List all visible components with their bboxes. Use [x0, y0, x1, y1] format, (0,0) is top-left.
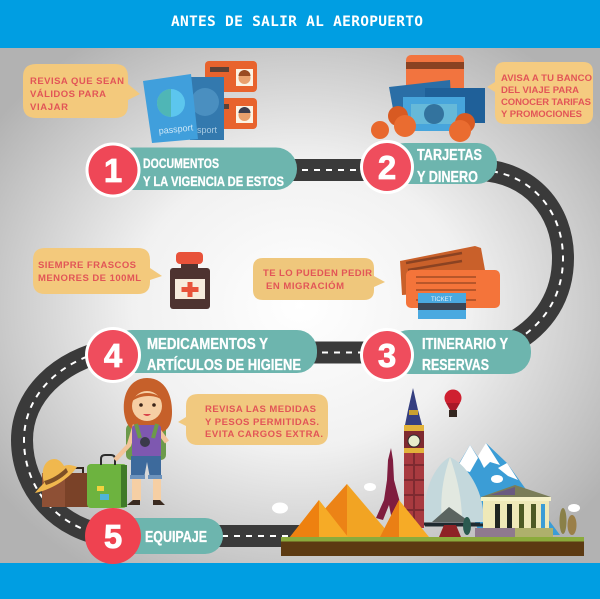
callout: itinerario: EN MIGRACIÓM: [266, 280, 344, 292]
step 1 pill: Y LA VIGENCIA DE ESTOS: [143, 174, 284, 189]
step 3 badge: [360, 328, 414, 382]
eiffel tower: [376, 448, 402, 520]
callout: tarjetas: AVISA A TU BANCO: [501, 73, 592, 84]
road: [22, 170, 563, 536]
icon: hot air balloon: [444, 390, 462, 417]
footer band: [0, 563, 600, 599]
step 1 badge: [86, 142, 140, 198]
lotus temple: [425, 457, 485, 525]
callout: documentos: VIAJAR: [30, 102, 68, 113]
step 3 pill: RESERVAS: [422, 357, 489, 374]
ground: [281, 541, 584, 556]
step 2 badge: [360, 140, 414, 194]
callout: itinerario: [253, 258, 385, 300]
parthenon: [475, 485, 553, 537]
callout: tarjetas: Y PROMOCIONES: [501, 109, 582, 120]
title: ANTES DE SALIR AL AEROPUERTO: [171, 14, 423, 30]
step 4 pill: [112, 330, 317, 374]
icon: tickets: TICKET: [431, 297, 453, 303]
icon: passports: [143, 74, 224, 143]
landmarks illustration: [272, 388, 584, 556]
callout: tarjetas: CONOCER TARIFAS: [501, 97, 591, 108]
mountains: [455, 443, 560, 535]
step 2 pill: Y DINERO: [417, 169, 478, 186]
step 3 pill: ITINERARIO Y: [422, 336, 509, 353]
big ben: [404, 388, 424, 528]
step 5 badge: 5: [104, 518, 122, 555]
callout: equipaje: [178, 394, 328, 445]
step 3 pill: [388, 330, 531, 374]
road rail: [424, 522, 480, 526]
icon: credit card and money: [371, 55, 485, 142]
callout: medicamentos: MENORES DE 100ML: [38, 273, 141, 284]
step 3 badge: 3: [378, 337, 396, 374]
callout: itinerario: TE LO PUEDEN PEDIR: [263, 268, 372, 279]
trees: [560, 508, 576, 535]
icon: traveller girl: [115, 378, 172, 505]
step 5 badge: [85, 508, 141, 564]
callout: tarjetas: [487, 62, 593, 124]
icon: id cards: [205, 61, 257, 129]
step 4 pill: MEDICAMENTOS Y: [147, 336, 269, 353]
icon: medicine bottle: [170, 252, 210, 309]
callout: documentos: VÁLIDOS PARA: [30, 89, 106, 100]
callout: medicamentos: [33, 248, 162, 294]
header band: [0, 0, 600, 48]
callout: documentos: [23, 64, 140, 118]
step 1 pill: DOCUMENTOS: [143, 156, 219, 171]
callout: documentos: REVISA QUE SEAN: [30, 76, 124, 87]
step 4 pill: ARTÍCULOS DE HIGIENE: [147, 357, 301, 374]
cloud: [272, 502, 288, 514]
step 2 badge: 2: [378, 149, 396, 186]
dome base: [439, 525, 461, 537]
step 2 pill: [385, 143, 497, 186]
icon: passports: sport: [197, 125, 218, 135]
pyramids: [290, 484, 429, 537]
small tree: [463, 517, 471, 535]
callout: equipaje: EVITA CARGOS EXTRA.: [205, 429, 323, 440]
callout: tarjetas: DEL VIAJE PARA: [501, 85, 579, 96]
step 4 badge: 4: [104, 337, 123, 374]
step 2 pill: TARJETAS: [417, 147, 482, 164]
step 4 badge: [85, 327, 141, 383]
step 5 pill: [113, 518, 223, 554]
clouds: [364, 475, 580, 512]
callout: equipaje: REVISA LAS MEDIDAS: [205, 404, 316, 415]
step 5 pill: EQUIPAJE: [145, 529, 207, 546]
icon: passports: passport: [158, 122, 194, 136]
callout: medicamentos: SIEMPRE FRASCOS: [38, 260, 136, 271]
step 1 pill: [112, 148, 297, 190]
callout: equipaje: Y PESOS PERMITIDAS.: [205, 417, 319, 428]
icon: tickets: [400, 246, 500, 319]
step 1 badge: 1: [104, 152, 122, 189]
icon: hat and suitcases: [35, 455, 127, 508]
